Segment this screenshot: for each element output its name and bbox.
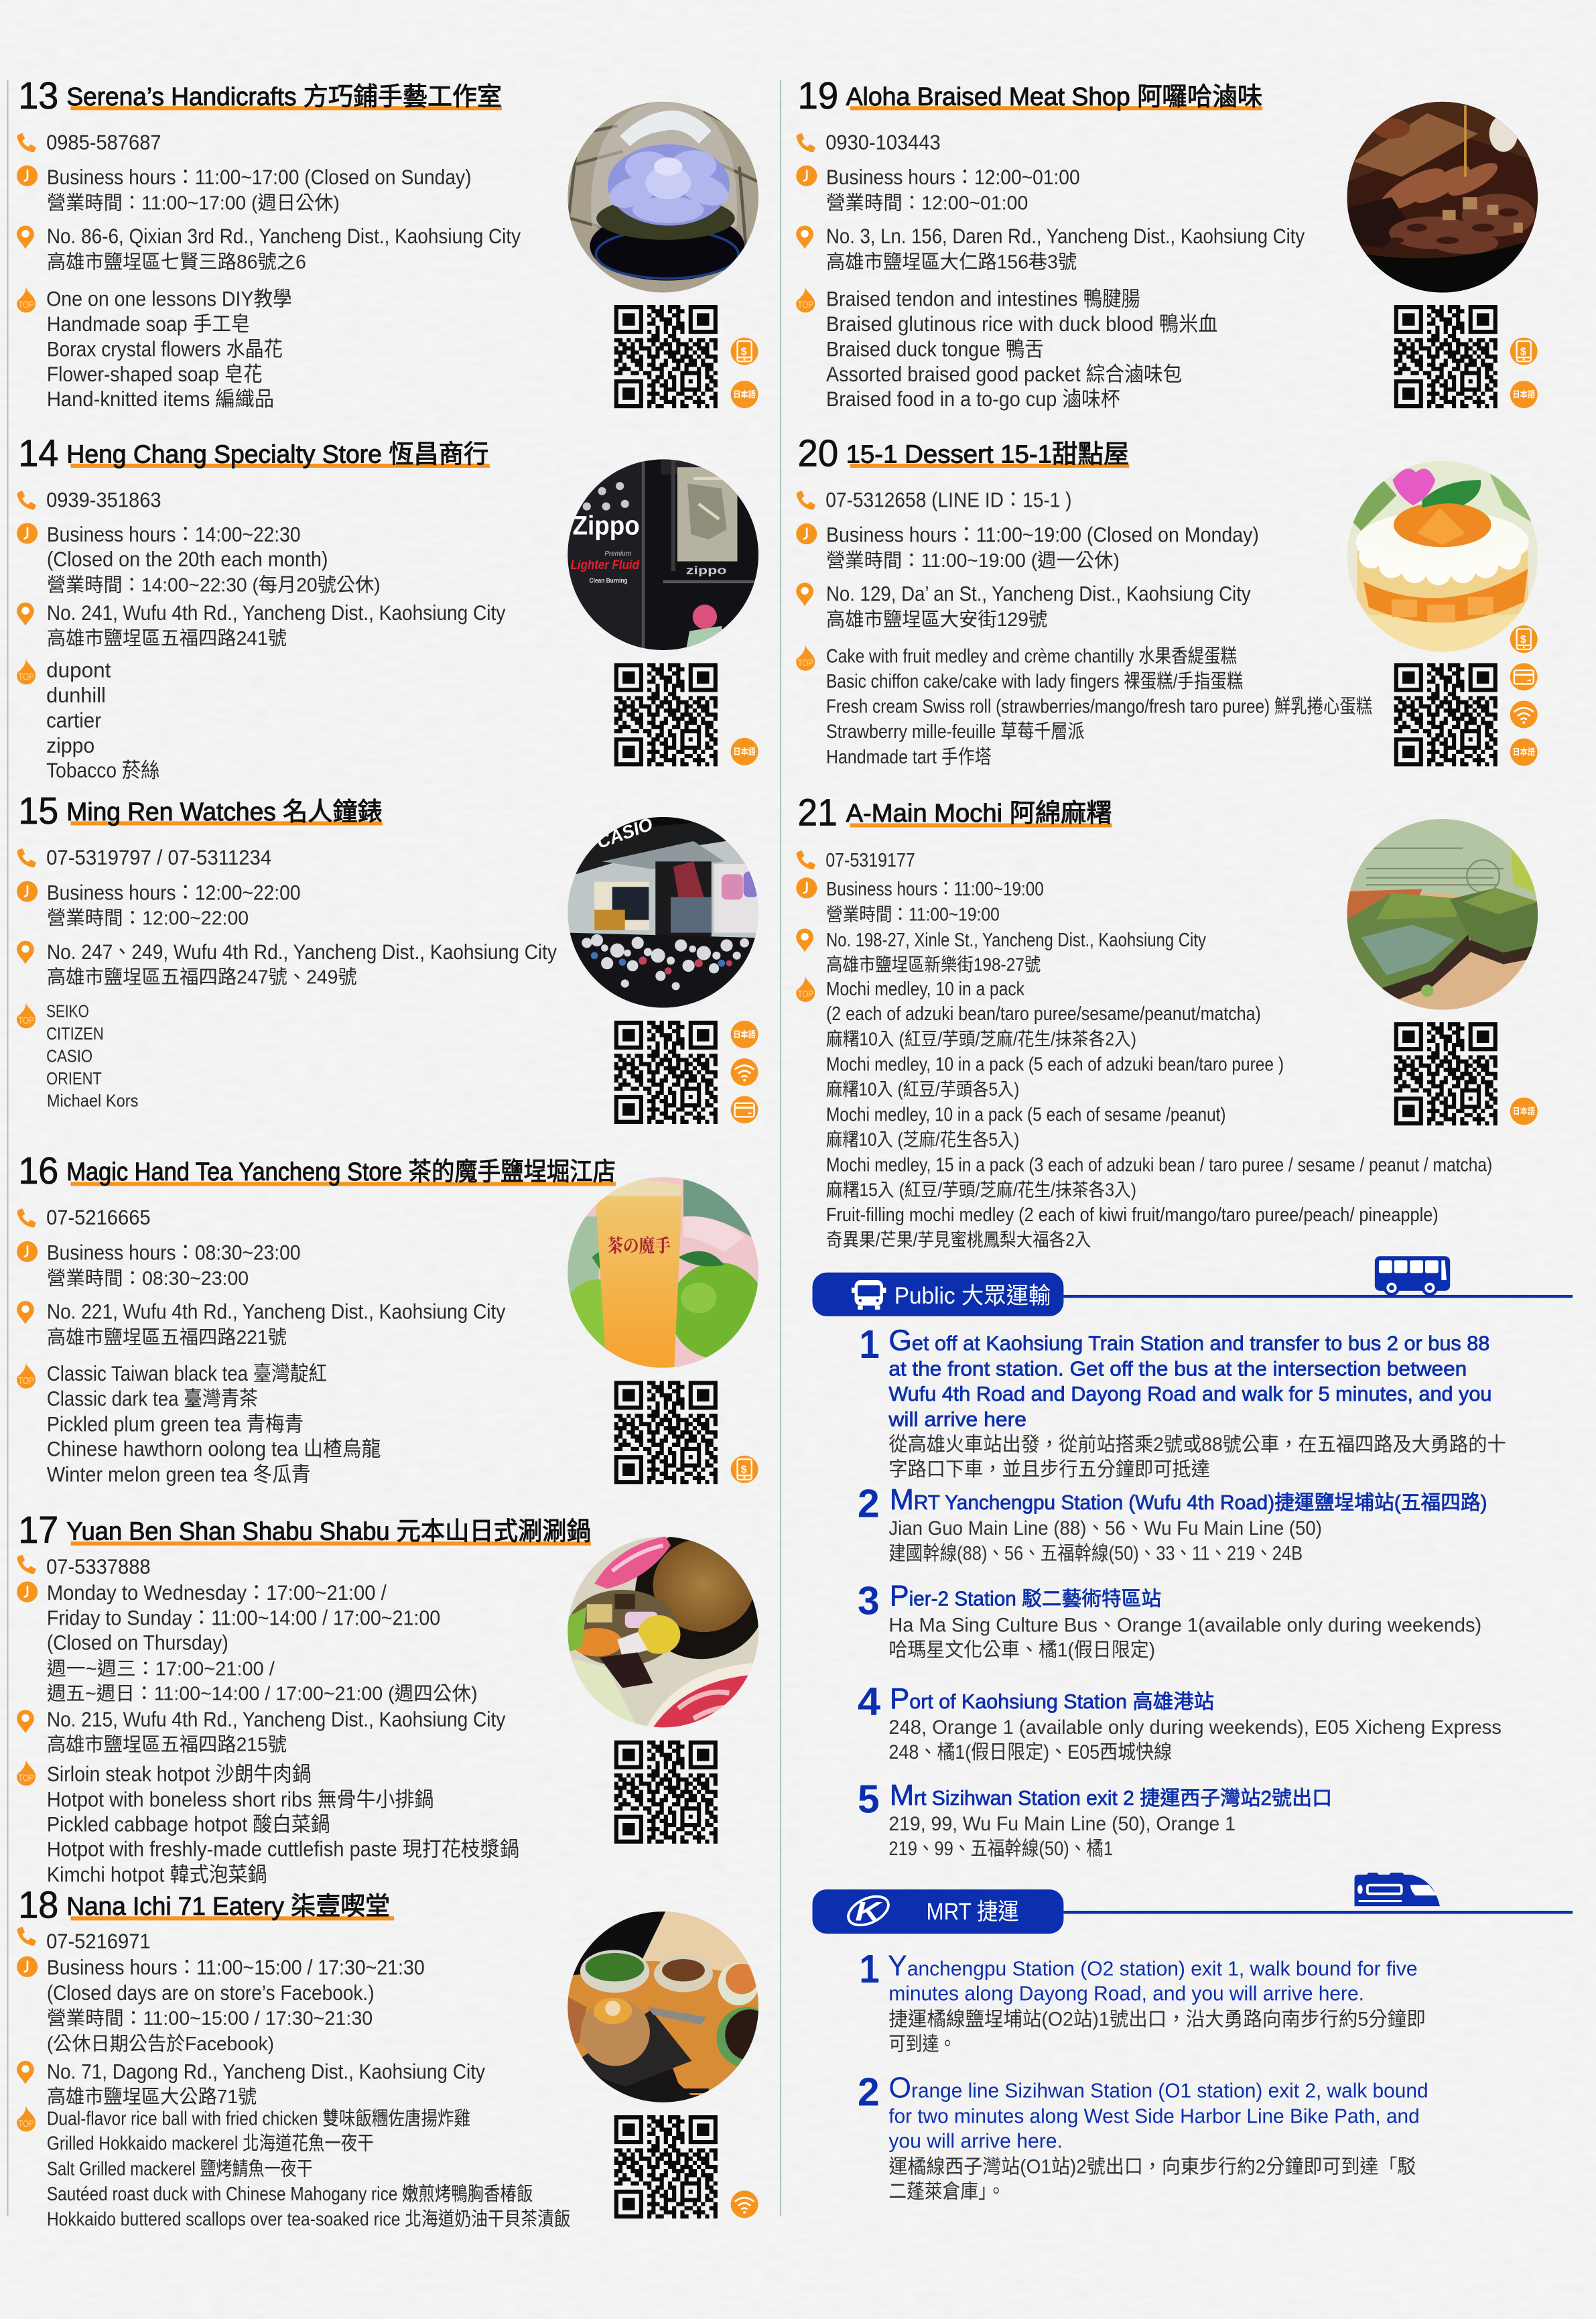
MRT route 2: Orange line Sizihwan Station (O1 station) exit 2, walk bound [888, 2071, 1428, 2104]
section header: MRT: MRT 捷運 [927, 1899, 1019, 1925]
route 4: Port of Kaohsiung Station 高雄港站 [890, 1682, 1214, 1715]
phone: 07-5216665 [46, 1206, 151, 1229]
top items: Kimchi hotpot 韓式泡菜鍋 [47, 1863, 267, 1887]
top items: Mochi medley, 10 in a pack (5 each of adzuki bean/taro puree ) [826, 1054, 1284, 1075]
top items: cartier [46, 709, 101, 733]
MRT route 1: 捷運橘線鹽埕埔站(O2站)1號出口，沿大勇路向南步行約5分鐘即 [888, 2008, 1426, 2030]
MRT route 1: minutes along Dayong Road, and you will arrive here. [888, 1983, 1364, 2005]
address [796, 225, 1305, 273]
business hours: Business hours：11:00~17:00 (Closed on Sunday) [47, 166, 472, 189]
business hours: 營業時間：08:30~23:00 [47, 1268, 249, 1290]
photo: Casio watch shop [568, 813, 758, 1008]
address: No. 241, Wufu 4th Rd., Yancheng Dist., Kaohsiung City [47, 601, 506, 625]
phone: 07-5337888 [46, 1555, 151, 1578]
service icon: wifi [731, 2190, 758, 2218]
service icon: Japanese: 日本語 [733, 747, 756, 757]
section header: Public: Public 大眾運輸 [894, 1283, 1051, 1309]
business hours [796, 523, 1259, 572]
top items [17, 1362, 381, 1486]
top items: TOP [797, 658, 813, 669]
MRT route 1: 可到達。 [888, 2033, 956, 2056]
MRT route 2: 2 [858, 2070, 880, 2115]
top items: TOP [797, 989, 813, 1000]
top items: 麻糬10入 (紅豆/芋頭各5入) [826, 1078, 1019, 1099]
business hours: Business hours：11:00~15:00 / 17:30~21:30 [47, 1956, 425, 1979]
heading: shop 15 [18, 790, 383, 832]
top items: Pickled cabbage hotpot 酸白菜鍋 [47, 1813, 330, 1836]
icon: train [1355, 1873, 1440, 1906]
QR code [1394, 663, 1498, 766]
panel: shop 21 A-Main Mochi [796, 791, 1538, 1250]
icon: KRTC logo [844, 1891, 893, 1931]
route 3: Pier-2 Station 駁二藝術特區站 [890, 1580, 1161, 1613]
business hours: 營業時間：12:00~01:00 [826, 192, 1028, 214]
panel: shop 14 Heng Chang Specialty Store [17, 432, 758, 782]
route 5 [858, 1776, 1332, 1860]
service icons [1510, 625, 1538, 766]
address [796, 929, 1206, 975]
top items: TOP [18, 672, 34, 682]
top items: Salt Grilled mackerel 鹽烤鯖魚一夜干 [47, 2159, 313, 2180]
route 4: 4 [858, 1679, 880, 1724]
address: 高雄市鹽埕區七賢三路86號之6 [47, 251, 306, 273]
photo: mango cake [1347, 460, 1538, 663]
MRT route 2: for two minutes along West Side Harbor Line Bike Path, and [888, 2105, 1420, 2127]
top items: TOP [18, 1015, 34, 1026]
service icon: Japanese: 日本語 [1513, 1107, 1535, 1117]
business hours [17, 523, 381, 596]
top items: Handmade soap 手工皂 [47, 312, 250, 336]
MRT route 2: 二蓬萊倉庫」。 [888, 2181, 1005, 2203]
heading: shop 21: 21 [797, 791, 838, 833]
heading: shop 14: Heng Chang Specialty Store 恆昌商行 [66, 440, 488, 468]
top items: Cake with fruit medley and crème chantilly 水果香緹蛋糕 [826, 646, 1237, 668]
route 5: 219、99、五福幹線(50)、橘1 [888, 1838, 1113, 1860]
business hours: (公休日期公告於Facebook) [47, 2033, 274, 2055]
business hours [17, 881, 301, 929]
business hours: Business hours：11:00~19:00 (Closed on Monday) [826, 523, 1259, 547]
route 1: will arrive here [888, 1409, 1026, 1431]
business hours: 營業時間：11:00~15:00 / 17:30~21:30 [47, 2008, 373, 2029]
address [17, 1300, 506, 1349]
heading: shop 20 [797, 432, 1129, 475]
business hours: 營業時間：12:00~22:00 [47, 907, 249, 929]
route 1: 1 [859, 1322, 880, 1367]
business hours [17, 1581, 478, 1705]
panel: shop 16 Magic Hand Tea [17, 1149, 767, 1486]
route 3: 哈瑪星文化公車、橘1(假日限定) [888, 1639, 1155, 1661]
route 5: Mrt Sizihwan Station exit 2 捷運西子灣站2號出口 [890, 1779, 1332, 1812]
panel: shop 20 15-1 Dessert [796, 432, 1538, 768]
business hours: Business hours：11:00~19:00 [826, 879, 1044, 900]
panel: shop 19 Aloha Braised Meat Shop [796, 74, 1538, 411]
route 1: Get off at Kaohsiung Train Station and transfer to bus 2 or bus 88 [888, 1324, 1489, 1357]
address: No. 247、249, Wufu 4th Rd., Yancheng Dist., Kaohsiung City [47, 940, 557, 964]
QR code [614, 2115, 718, 2218]
heading: shop 16: 16 [18, 1149, 58, 1192]
icon: KRTC logo: K [855, 1897, 883, 1926]
top items: SEIKO [46, 1003, 89, 1021]
icon: bus side [1375, 1256, 1450, 1296]
business hours: (Closed on the 20th each month) [47, 548, 328, 571]
phone [797, 850, 915, 871]
MRT route 1 [859, 1946, 1426, 2056]
route 1: Wufu 4th Road and Dayong Road and walk for 5 minutes, and you [888, 1383, 1491, 1405]
top items: Hotpot with boneless short ribs 無骨牛小排鍋 [47, 1788, 434, 1811]
top items: Sirloin steak hotpot 沙朗牛肉鍋 [47, 1762, 311, 1785]
address: No. 198-27, Xinle St., Yancheng Dist., Kaohsiung City [826, 930, 1206, 951]
photo: zippo lighters: Clean Burning [590, 577, 628, 584]
route 3 [858, 1578, 1481, 1661]
heading: shop 18: 18 [18, 1884, 58, 1926]
photo: braised meats [1347, 101, 1538, 293]
address: 高雄市鹽埕區新樂街198-27號 [826, 954, 1041, 975]
photo: zippo lighters: Lighter Fluid [571, 558, 639, 572]
panel: shop 17 Yuan Ben Shan Shabu Shabu [17, 1509, 767, 1887]
top items: Braised duck tongue 鴨舌 [826, 338, 1044, 361]
service icon: mobile pay [731, 1456, 758, 1483]
photo: Casio watch shop: CASIO [594, 813, 655, 853]
panel: shop 15 Ming Ren Watches [17, 790, 758, 1124]
phone: 07-5216971 [46, 1930, 151, 1953]
business hours: (Closed days are on store’s Facebook.) [47, 1981, 375, 2005]
top items: TOP [18, 2119, 34, 2129]
top items: Handmade tart 手作塔 [826, 747, 992, 768]
top items: ORIENT [46, 1070, 102, 1088]
route 3: Ha Ma Sing Culture Bus、Orange 1(available only during weekends) [888, 1614, 1481, 1636]
business hours: Business hours：14:00~22:30 [47, 523, 301, 546]
phone: 07-5319797 / 07-5311234 [46, 846, 271, 869]
top items [17, 1003, 138, 1111]
top items: Dual-flavor rice ball with fried chicken 雙味飯糰佐唐揚炸雞 [47, 2108, 470, 2129]
QR code [614, 1021, 718, 1124]
panel: shop 13 Serena's Handicrafts [17, 74, 758, 411]
top items: dunhill [46, 684, 106, 707]
photo: matcha mochi [1347, 819, 1538, 1010]
heading: shop 14: 14 [18, 432, 58, 475]
section header: MRT [813, 1889, 1573, 1934]
QR code [614, 1381, 718, 1484]
phone: 07-5319177 [825, 850, 915, 871]
top items: Hand-knitted items 編織品 [47, 387, 274, 411]
icon: bus front [852, 1280, 886, 1310]
top items: 麻糬10入 (紅豆/芋頭/芝麻/花生/抹茶各2入) [826, 1028, 1136, 1049]
heading: shop 17 [18, 1509, 591, 1551]
service icon: Japanese [731, 738, 758, 765]
business hours [17, 1241, 301, 1290]
business hours: Business hours：08:30~23:00 [47, 1241, 301, 1265]
route 1: at the front station. Get off the bus at the intersection between [888, 1359, 1467, 1381]
route 4: 248, Orange 1 (available only during weekends), E05 Xicheng Express [888, 1716, 1502, 1739]
route 2: MRT Yanchengpu Station (Wufu 4th Road)捷運鹽埕埔站(五福四路) [890, 1483, 1487, 1516]
top items: Assorted braised good packet 綜合滷味包 [826, 363, 1182, 386]
heading: shop 15: 15 [18, 790, 58, 832]
top items: 奇異果/芒果/芋見蜜桃鳳梨大福各2入 [826, 1229, 1091, 1250]
panel: shop 18 Nana Ichi 71 Eatery [17, 1884, 777, 2231]
heading: shop 13: Serena’s Handicrafts 方巧鋪手藝工作室 [66, 83, 502, 111]
route 4: 248、橘1(假日限定)、E05西城快線 [888, 1741, 1172, 1763]
top items [17, 659, 159, 782]
top items [17, 1760, 519, 1887]
business hours [17, 166, 472, 214]
service icon: Japanese [1510, 1098, 1538, 1125]
QR code [614, 305, 718, 408]
photo: zippo lighters: Zippo [573, 511, 640, 540]
address [17, 940, 557, 989]
photo: zippo lighters: Premium [604, 550, 631, 558]
service icons: 日本語 [733, 389, 756, 399]
route 2: Jian Guo Main Line (88)、56、Wu Fu Main Line (50) [888, 1517, 1322, 1540]
top items: Classic Taiwan black tea 臺灣靛紅 [47, 1362, 327, 1385]
top items: TOP [18, 1376, 34, 1387]
top items: Mochi medley, 10 in a pack (5 each of sesame /peanut) [826, 1104, 1226, 1125]
top items: Hokkaido buttered scallops over tea-soaked rice 北海道奶油干貝茶漬飯 [47, 2209, 571, 2231]
phone: 07-5312658 (LINE ID：15-1 ) [825, 488, 1072, 511]
business hours: 營業時間：11:00~19:00 [826, 903, 1000, 924]
address [17, 1708, 506, 1756]
top items: Basic chiffon cake/cake with lady fingers 裸蛋糕/手指蛋糕 [826, 671, 1243, 692]
heading: shop 16 [18, 1149, 616, 1192]
address: No. 215, Wufu 4th Rd., Yancheng Dist., Kaohsiung City [47, 1708, 506, 1731]
heading: shop 13 [18, 74, 502, 117]
service icons: 日本語 [1513, 747, 1535, 757]
QR code [1394, 305, 1498, 408]
panel: MRT directions [813, 1873, 1573, 2203]
top items [796, 287, 1217, 411]
photo: zippo lighters [568, 459, 758, 650]
address: No. 129, Da’ an St., Yancheng Dist., Kaohsiung City [826, 582, 1251, 606]
phone: 0939-351863 [46, 488, 161, 511]
photo: rice ball set meal [568, 1911, 777, 2103]
MRT route 1: 1 [859, 1946, 880, 1991]
top items: Flower-shaped soap 皂花 [47, 363, 263, 386]
address [17, 2060, 485, 2108]
heading: shop 18 [18, 1884, 394, 1926]
MRT route 2: you will arrive here. [888, 2131, 1063, 2153]
address: No. 221, Wufu 4th Rd., Yancheng Dist., Kaohsiung City [47, 1300, 506, 1324]
top items: zippo [46, 734, 94, 757]
route 3: 3 [858, 1578, 880, 1623]
top items: Fruit-filling mochi medley (2 each of kiwi fruit/mango/taro puree/peach/ pineapple) [826, 1204, 1439, 1226]
top items: Winter melon green tea 冬瓜青 [47, 1462, 311, 1486]
top items: Chinese hawthorn oolong tea 山楂烏龍 [47, 1438, 381, 1461]
heading: shop 21: A-Main Mochi 阿綿麻糬 [846, 800, 1112, 828]
route 2: 建國幹線(88)、56、五福幹線(50)、33、11、219、24B [888, 1542, 1303, 1564]
top items: Braised glutinous rice with duck blood 鴨米血 [826, 312, 1217, 336]
photo: hotpot ingredients [568, 1529, 767, 1728]
heading: shop 20: 15-1 Dessert 15-1甜點屋 [846, 440, 1129, 468]
section header: Public [813, 1273, 1573, 1316]
heading: shop 21 [797, 791, 1112, 833]
address: 高雄市鹽埕區大公路71號 [47, 2086, 257, 2108]
address: No. 71, Dagong Rd., Yancheng Dist., Kaohsiung City [47, 2060, 485, 2083]
QR code [1394, 1022, 1498, 1125]
service icons [1510, 338, 1538, 408]
business hours: Monday to Wednesday：17:00~21:00 / [47, 1581, 387, 1605]
top items [17, 2106, 571, 2231]
business hours: 週五~週日：11:00~14:00 / 17:00~21:00 (週四公休) [47, 1684, 478, 1705]
photo: glass dome rose [568, 101, 758, 293]
photo: tea and green plums [563, 1177, 767, 1368]
top items: Mochi medley, 10 in a pack [826, 979, 1024, 1000]
top items: Hotpot with freshly-made cuttlefish paste 現打花枝漿鍋 [47, 1838, 519, 1861]
heading: shop 14 [18, 432, 490, 475]
heading: shop 13: 13 [18, 74, 58, 117]
MRT route 1: Yanchengpu Station (O2 station) exit 1, walk bound for five [888, 1949, 1418, 1982]
business hours: 營業時間：11:00~17:00 (週日公休) [47, 192, 340, 214]
route 2 [858, 1481, 1487, 1564]
heading: shop 16: Magic Hand Tea Yancheng Store 茶的魔手鹽埕堀江店 [66, 1158, 616, 1186]
top items: Michael Kors [47, 1092, 138, 1111]
photo: zippo lighters: zippo [686, 564, 727, 577]
heading: shop 19: 19 [797, 74, 838, 117]
service icons: 日本語 [733, 1029, 756, 1040]
heading: shop 15: Ming Ren Watches 名人鐘錶 [66, 798, 383, 826]
top items: One on one lessons DIY教學 [46, 288, 292, 311]
top items: Classic dark tea 臺灣青茶 [47, 1387, 258, 1410]
top items: Grilled Hokkaido mackerel 北海道花魚一夜干 [47, 2133, 374, 2155]
business hours: Business hours：12:00~01:00 [826, 166, 1080, 189]
top items: Fresh cream Swiss roll (strawberries/mango/fresh taro puree) 鮮乳捲心蛋糕 [826, 696, 1372, 718]
top items: Sautéed roast duck with Chinese Mahogany rice 嫩煎烤鴨胸香椿飯 [47, 2184, 533, 2205]
address: No. 86-6, Qixian 3rd Rd., Yancheng Dist., Kaohsiung City [47, 225, 521, 248]
top items: Braised tendon and intestines 鴨腱腸 [826, 288, 1140, 311]
top items: TOP [18, 300, 34, 311]
route 1 [859, 1322, 1506, 1481]
top items: Borax crystal flowers 水晶花 [47, 338, 283, 361]
heading: shop 17: 17 [18, 1509, 58, 1551]
QR code [614, 663, 718, 766]
photo: tea and green plums: 茶の魔手 [607, 1236, 671, 1256]
address: 高雄市鹽埕區大仁路156巷3號 [826, 251, 1077, 273]
address [17, 225, 521, 273]
address [17, 601, 506, 649]
heading: shop 20: 20 [797, 432, 838, 475]
top items: dupont [46, 659, 111, 682]
route 5: 5 [858, 1776, 880, 1821]
top items: (2 each of adzuki bean/taro puree/sesame/peanut/matcha) [826, 1003, 1261, 1025]
top items: Pickled plum green tea 青梅青 [47, 1412, 304, 1436]
panel: public transport directions [813, 1256, 1573, 1860]
business hours: 週一~週三：17:00~21:00 / [47, 1659, 275, 1680]
heading: shop 18: Nana Ichi 71 Eatery 柒壹喫堂 [66, 1893, 390, 1921]
top items: CASIO [46, 1047, 92, 1066]
phone: 0930-103443 [825, 131, 941, 154]
top items: Tobacco 菸絲 [46, 759, 159, 782]
address: 高雄市鹽埕區五福四路247號、249號 [47, 967, 357, 989]
business hours [796, 877, 1044, 924]
route 1: 字路口下車，並且步行五分鐘即可抵達 [888, 1458, 1210, 1481]
route 4 [858, 1679, 1502, 1763]
service icons: 日本語 [1513, 389, 1535, 399]
top items [796, 977, 1492, 1250]
top items: Mochi medley, 15 in a pack (3 each of adzuki bean / taro puree / sesame / peanut / matcha) [826, 1155, 1492, 1176]
heading: shop 19: Aloha Braised Meat Shop 阿囉哈滷味 [846, 83, 1262, 111]
MRT route 2: 運橘線西子灣站(O1站)2號出口，向東步行約2分鐘即可到達「駁 [888, 2156, 1416, 2178]
business hours: Business hours：12:00~22:00 [47, 881, 301, 904]
route 5: 219, 99, Wu Fu Main Line (50), Orange 1 [888, 1813, 1236, 1835]
business hours [17, 1956, 425, 2055]
top items: Strawberry mille-feuille 草莓千層派 [826, 721, 1085, 743]
service icons [731, 338, 758, 408]
service icons [731, 1021, 758, 1123]
top items [17, 287, 292, 411]
QR code [614, 1741, 718, 1844]
heading: shop 17: Yuan Ben Shan Shabu Shabu 元本山日式涮涮鍋 [66, 1518, 591, 1546]
address: 高雄市鹽埕區五福四路221號 [47, 1327, 287, 1349]
business hours: (Closed on Thursday) [47, 1631, 228, 1655]
address: 高雄市鹽埕區五福四路215號 [47, 1735, 287, 1756]
phone: 0985-587687 [46, 131, 161, 154]
top items: TOP [18, 1773, 34, 1783]
MRT route 2 [858, 2070, 1428, 2203]
top items: 麻糬10入 (芝麻/花生各5入) [826, 1129, 1019, 1150]
address: No. 3, Ln. 156, Daren Rd., Yancheng Dist., Kaohsiung City [826, 225, 1305, 248]
top items: 麻糬15入 (紅豆/芋頭/芝麻/花生/抹茶各3入) [826, 1180, 1136, 1200]
address: 高雄市鹽埕區五福四路241號 [47, 628, 287, 649]
address: 高雄市鹽埕區大安街129號 [826, 609, 1047, 631]
business hours [796, 166, 1080, 214]
top items: CITIZEN [46, 1025, 104, 1044]
phone [17, 1926, 151, 1953]
top items [796, 645, 1372, 768]
heading: shop 19 [797, 74, 1262, 117]
route 2: 2 [858, 1481, 880, 1526]
top items: Braised food in a to-go cup 滷味杯 [826, 387, 1120, 411]
business hours: Friday to Sunday：11:00~14:00 / 17:00~21:00 [47, 1606, 440, 1629]
top items: TOP [797, 300, 813, 311]
business hours: 營業時間：14:00~22:30 (每月20號公休) [47, 574, 381, 596]
address [796, 582, 1251, 631]
business hours: 營業時間：11:00~19:00 (週一公休) [826, 550, 1120, 572]
route 1: 從高雄火車站出發，從前站搭乘2號或88號公車，在五福四路及大勇路的十 [888, 1434, 1506, 1456]
